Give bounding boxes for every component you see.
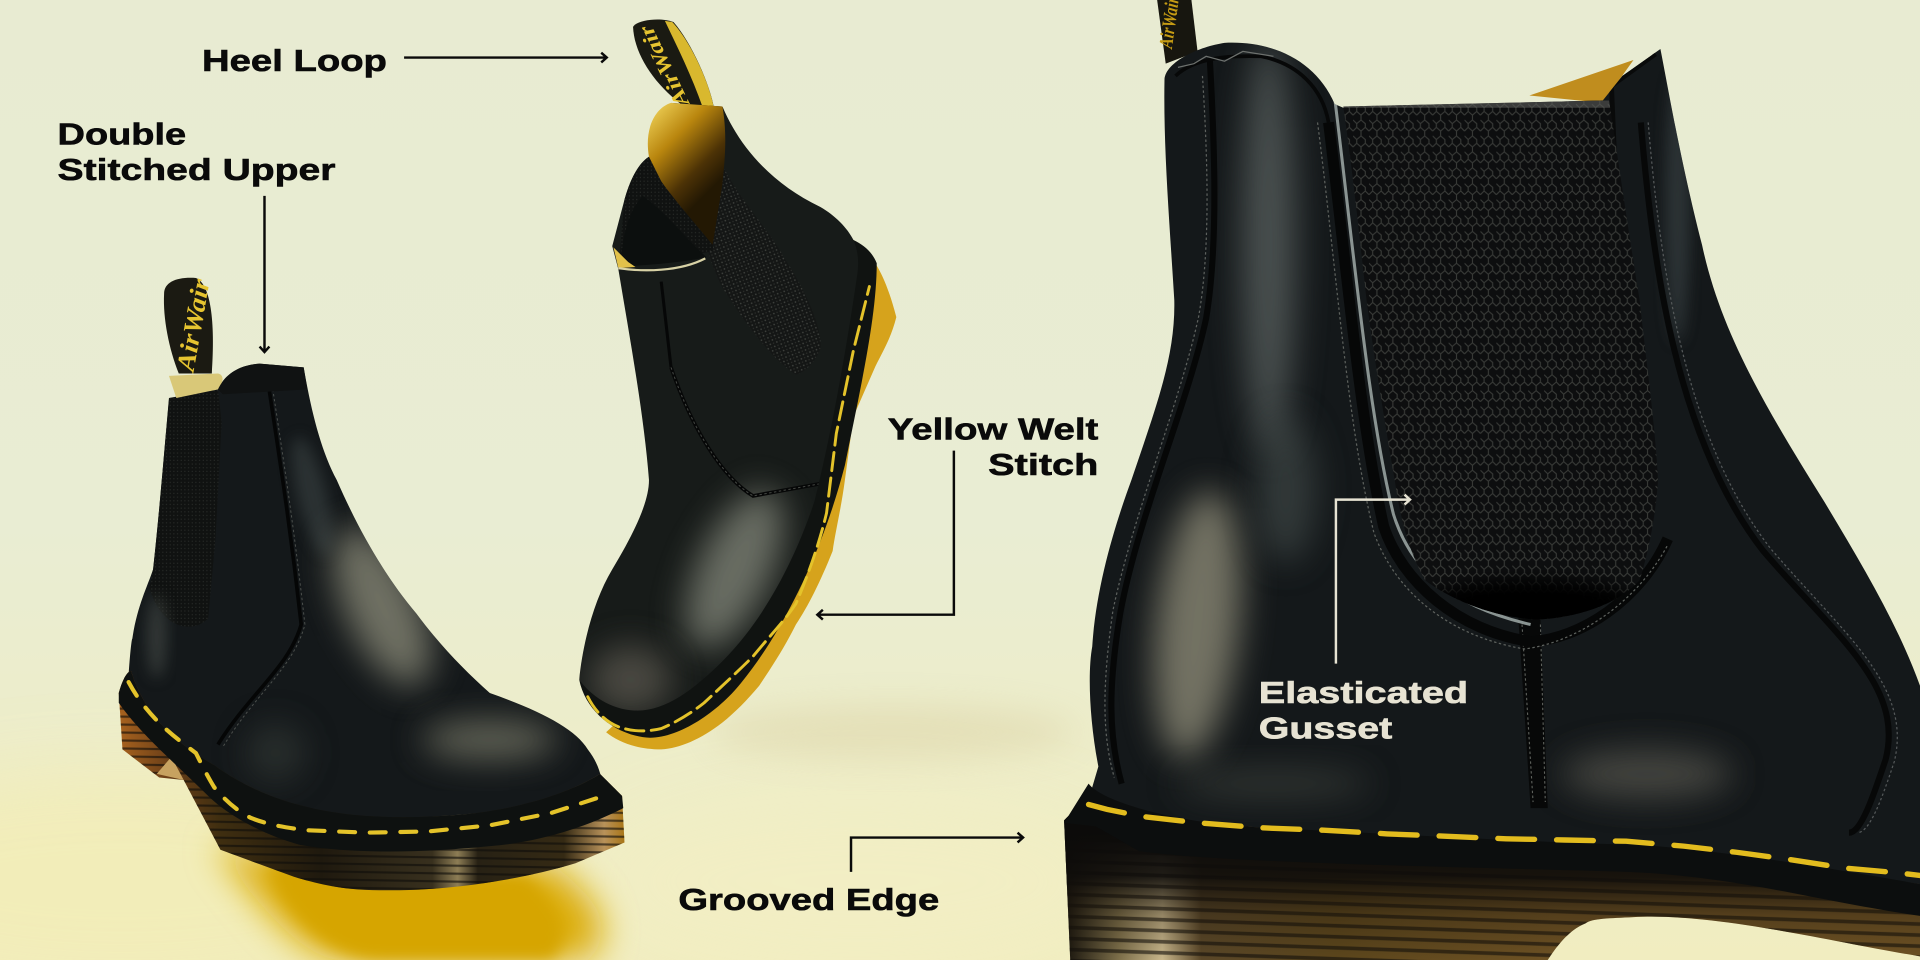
boot opening: floating boot	[618, 157, 722, 267]
label: Grooved Edge with arrow	[678, 833, 1023, 917]
yellow sole edge: floating boot	[606, 240, 896, 749]
heel loop: large boot	[1156, 0, 1198, 64]
arrow: double stitched upper	[260, 196, 269, 352]
mesh gusset: floating boot	[708, 165, 821, 375]
label: Elasticated Gusset with arrow: Gusset	[1259, 711, 1392, 745]
right floating boot	[576, 19, 896, 749]
welt stitching: large boot	[1089, 804, 1920, 876]
lining: large boot	[1529, 60, 1633, 103]
label: Heel Loop with arrow: Heel Loop	[202, 44, 387, 78]
label: Grooved Edge with arrow: Grooved Edge	[678, 883, 939, 917]
yellow lining: floating boot	[648, 103, 725, 245]
label: Double Stitched Upper with arrow: Double	[58, 117, 186, 151]
left boot	[110, 276, 624, 890]
welt stitching: left boot	[129, 682, 600, 833]
arrow: yellow welt stitch	[817, 451, 954, 620]
heel loop: left boot: AirWair	[170, 276, 216, 375]
label: Elasticated Gusset with arrow	[1259, 495, 1468, 745]
large boot detail	[1053, 0, 1920, 960]
arrow: elasticated gusset	[1336, 495, 1410, 664]
label: Heel Loop with arrow	[202, 44, 607, 78]
label: Yellow Welt Stitch with arrow: Stitch	[988, 448, 1098, 482]
arrow: grooved edge	[851, 833, 1023, 872]
collar lip: floating boot	[613, 247, 705, 270]
label: Double Stitched Upper with arrow	[58, 117, 336, 352]
label: Yellow Welt Stitch with arrow: Yellow Welt	[888, 413, 1098, 447]
welt: floating boot	[579, 240, 877, 738]
label: Double Stitched Upper with arrow: Stitched Upper	[58, 153, 336, 187]
boot upper: floating boot	[579, 102, 858, 716]
welt stitching: floating boot	[588, 287, 869, 731]
sole: left boot	[119, 671, 624, 890]
label: Yellow Welt Stitch with arrow	[817, 413, 1098, 620]
boot upper: left boot	[128, 364, 600, 818]
boot upper: large boot	[1053, 24, 1920, 906]
shadow: yellow floor shadow beneath left boot	[214, 845, 603, 960]
collar: left boot	[218, 364, 307, 394]
heel loop: floating boot	[633, 19, 714, 113]
insole tab: left boot	[169, 373, 223, 398]
inner shadow: floating boot	[621, 196, 707, 267]
heel loop: floating boot: AirWair	[633, 20, 695, 113]
label: Elasticated Gusset with arrow: Elasticated	[1259, 676, 1468, 710]
arrow: heel loop	[404, 53, 607, 62]
sole: large boot	[1064, 784, 1920, 960]
elastic gusset: large boot	[1335, 96, 1665, 633]
